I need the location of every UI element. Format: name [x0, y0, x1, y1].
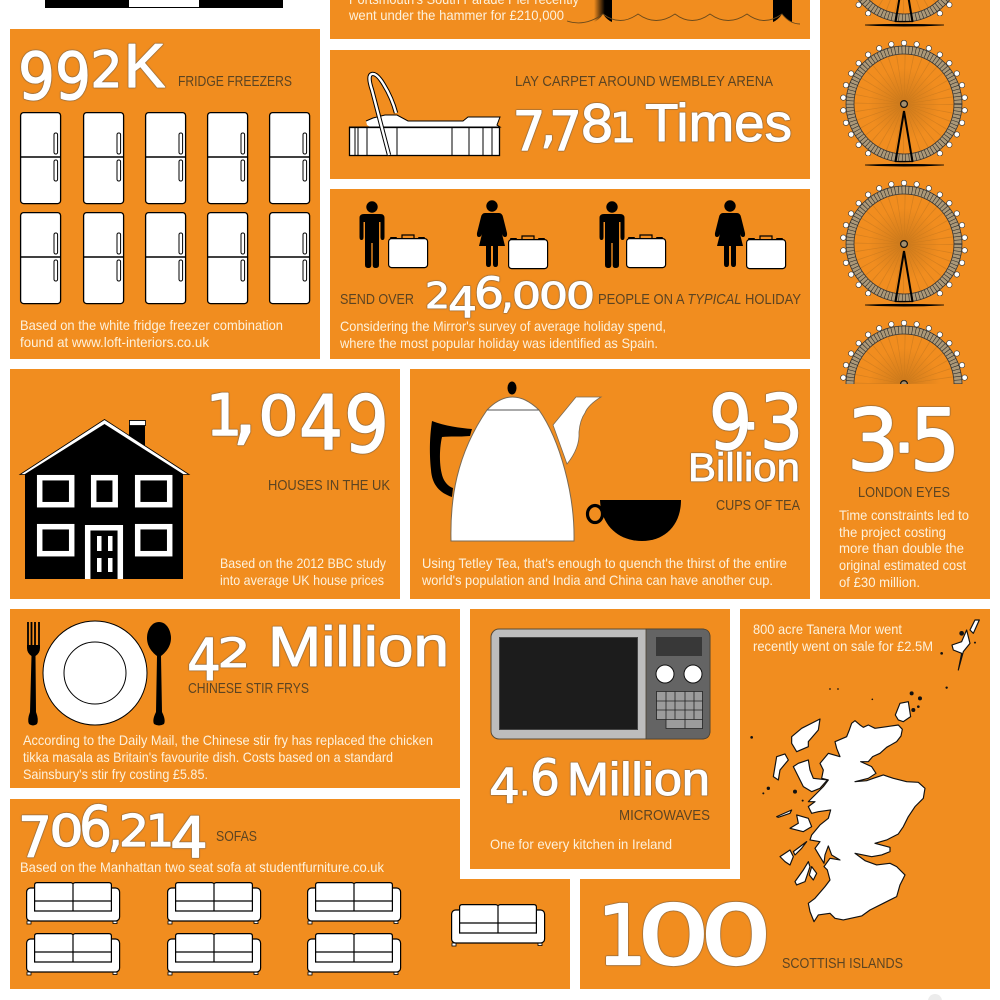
icon: spoon	[147, 622, 171, 726]
number: 706,214: 4	[170, 806, 208, 871]
label: london eyes: LONDON EYES	[858, 485, 950, 501]
number: 9.3 Billion: .	[743, 383, 759, 441]
icon: map of scotland	[750, 620, 979, 922]
note: pier sale: went under the hammer for £210,000	[348, 7, 564, 23]
note: cost: more than double the	[839, 540, 964, 556]
panel: scottish islands	[580, 609, 990, 989]
panel: sofas	[10, 795, 570, 989]
note: tea: Using Tetley Tea, that's enough to quench the thirst of the entire	[422, 555, 787, 571]
panel: fridge freezers	[10, 29, 320, 359]
number: 9.3 Billion: 9	[709, 378, 752, 467]
number: 7,781 Times: 7	[512, 100, 546, 163]
label: lay carpet: LAY CARPET AROUND WEMBLEY ARENA	[515, 74, 773, 90]
note: fridge source: found at www.loft-interiors.co.uk	[20, 334, 210, 350]
label: send over: SEND OVER	[340, 292, 414, 308]
number: 42 Million: 4	[187, 626, 221, 694]
icon: travellers with suitcases	[360, 200, 786, 269]
note: holiday source: where the most popular holiday was identified as Spain.	[339, 335, 658, 351]
label: fridge freezers: FRIDGE FREEZERS	[178, 74, 292, 90]
panel: london eyes	[820, 0, 990, 599]
number: 706,214: 1	[146, 806, 174, 857]
label: cups of tea: CUPS OF TEA	[716, 498, 800, 514]
number: 246,000: 6	[474, 269, 504, 319]
note: holiday source: Considering the Mirror's survey of average holiday spend,	[340, 318, 666, 334]
number: 100: 1	[598, 889, 646, 984]
number: 706,214: 0	[50, 806, 84, 857]
number: 992K: 9	[18, 40, 55, 115]
icon: wembley stadium	[349, 74, 500, 156]
number: 706,214: 2	[119, 806, 149, 857]
number: 1,049: 4	[299, 379, 343, 467]
number: 4.6 Million: 6	[530, 749, 560, 807]
label: microwaves: MICROWAVES	[619, 808, 710, 824]
icon: sofas	[27, 883, 545, 975]
number: 246,000: 4	[448, 278, 477, 327]
note: cost: original estimated cost	[839, 557, 966, 573]
number: 992K: 9	[55, 40, 91, 115]
icon: pier curtain	[567, 0, 800, 24]
number: 3.5: 5	[910, 392, 960, 491]
number: 1,049: 0	[258, 384, 298, 448]
number: 706,214: 6	[79, 795, 112, 860]
number: 7,781 Times: 1	[610, 104, 636, 152]
number: 42 Million: 2	[218, 631, 250, 677]
icon: london eye wheels	[843, 0, 965, 446]
note: stir fry: Sainsbury's stir fry costing £5.85.	[23, 766, 208, 782]
number: 4.6 Million: .	[520, 768, 530, 803]
note: ireland: One for every kitchen in Ireland	[490, 836, 672, 852]
number: 100: 0	[637, 889, 710, 984]
panel: stir frys	[10, 609, 460, 788]
number: 246,000: 2	[425, 276, 450, 317]
note: cost: Time constraints led to	[839, 507, 969, 523]
note: tanera mor: 800 acre Tanera Mor went	[753, 621, 902, 637]
number: 1,049: 9	[344, 381, 389, 471]
icon: teacup	[588, 500, 681, 541]
icon: plate	[43, 621, 147, 725]
number: 246,000: 0	[539, 276, 568, 317]
number: 3.5: 3	[847, 392, 899, 491]
label: chinese stir frys: CHINESE STIR FRYS	[188, 681, 309, 697]
number: 1,049: 1	[206, 383, 242, 449]
number: 706,214: ,	[108, 803, 123, 857]
label: sofas: SOFAS	[216, 829, 257, 845]
number: 246,000: 0	[512, 276, 541, 317]
number: 4.6 Million: Million	[567, 753, 710, 805]
number: 246,000: ,	[501, 272, 514, 318]
icon: microwave	[491, 629, 710, 739]
number: 7,781 Times: Times	[645, 94, 792, 153]
note: tea: world's population and India and China can have another cup.	[421, 572, 773, 588]
note: sofa source: Based on the Manhattan two seat sofa at studentfurniture.co.uk	[20, 859, 385, 875]
top fragment: black bar	[45, 0, 283, 8]
icon: fork	[27, 622, 40, 726]
panel: pier	[330, 0, 810, 39]
label: scottish islands: SCOTTISH ISLANDS	[782, 956, 903, 972]
note: cost: of £30 million.	[839, 574, 920, 590]
number: 992K: K	[124, 32, 165, 101]
number: 7,781 Times: ,	[540, 95, 557, 155]
icon: teapot	[430, 382, 601, 541]
panel: tea	[410, 369, 810, 599]
note: fridge source: Based on the white fridge freezer combination	[20, 317, 283, 333]
number: 4.6 Million: 4	[489, 759, 520, 815]
panel: houses	[10, 361, 400, 599]
note: houses source: into average UK house prices	[220, 572, 384, 588]
number: 42 Million: Million	[268, 615, 449, 679]
number: 706,214: 7	[18, 806, 52, 871]
panel: wembley carpet	[330, 50, 810, 179]
panel: microwaves	[470, 609, 730, 869]
number: 100: 0	[700, 889, 772, 984]
number: 3.5: .	[893, 387, 915, 469]
number: 7,781 Times: 8	[580, 95, 614, 155]
number: 1,049: ,	[232, 361, 257, 454]
label: houses: HOUSES IN THE UK	[268, 478, 390, 494]
note: houses source: Based on the 2012 BBC study	[220, 555, 386, 571]
number: 9.3 Billion: 3	[760, 378, 803, 467]
note: stir fry: According to the Daily Mail, the Chinese stir fry has replaced the chicken	[23, 732, 433, 748]
note: stir fry: tikka masala as Britain's favourite dish. Costs based on a standard	[23, 749, 393, 765]
number: 992K: 2	[90, 41, 122, 99]
number: 9.3 Billion: Billion	[688, 446, 800, 490]
label: people on a typical holiday: PEOPLE ON A TYPICAL HOLIDAY	[598, 292, 801, 308]
panel: holiday	[330, 189, 810, 359]
note: cost: the project costing	[839, 524, 946, 540]
number: 7,781 Times: 7	[549, 100, 582, 163]
note: tanera mor: recently went on sale for £2.5M	[753, 638, 933, 654]
icon: grid of fridge freezers	[20, 113, 310, 304]
icon: house	[20, 420, 189, 579]
number: 246,000: 0	[566, 276, 595, 317]
